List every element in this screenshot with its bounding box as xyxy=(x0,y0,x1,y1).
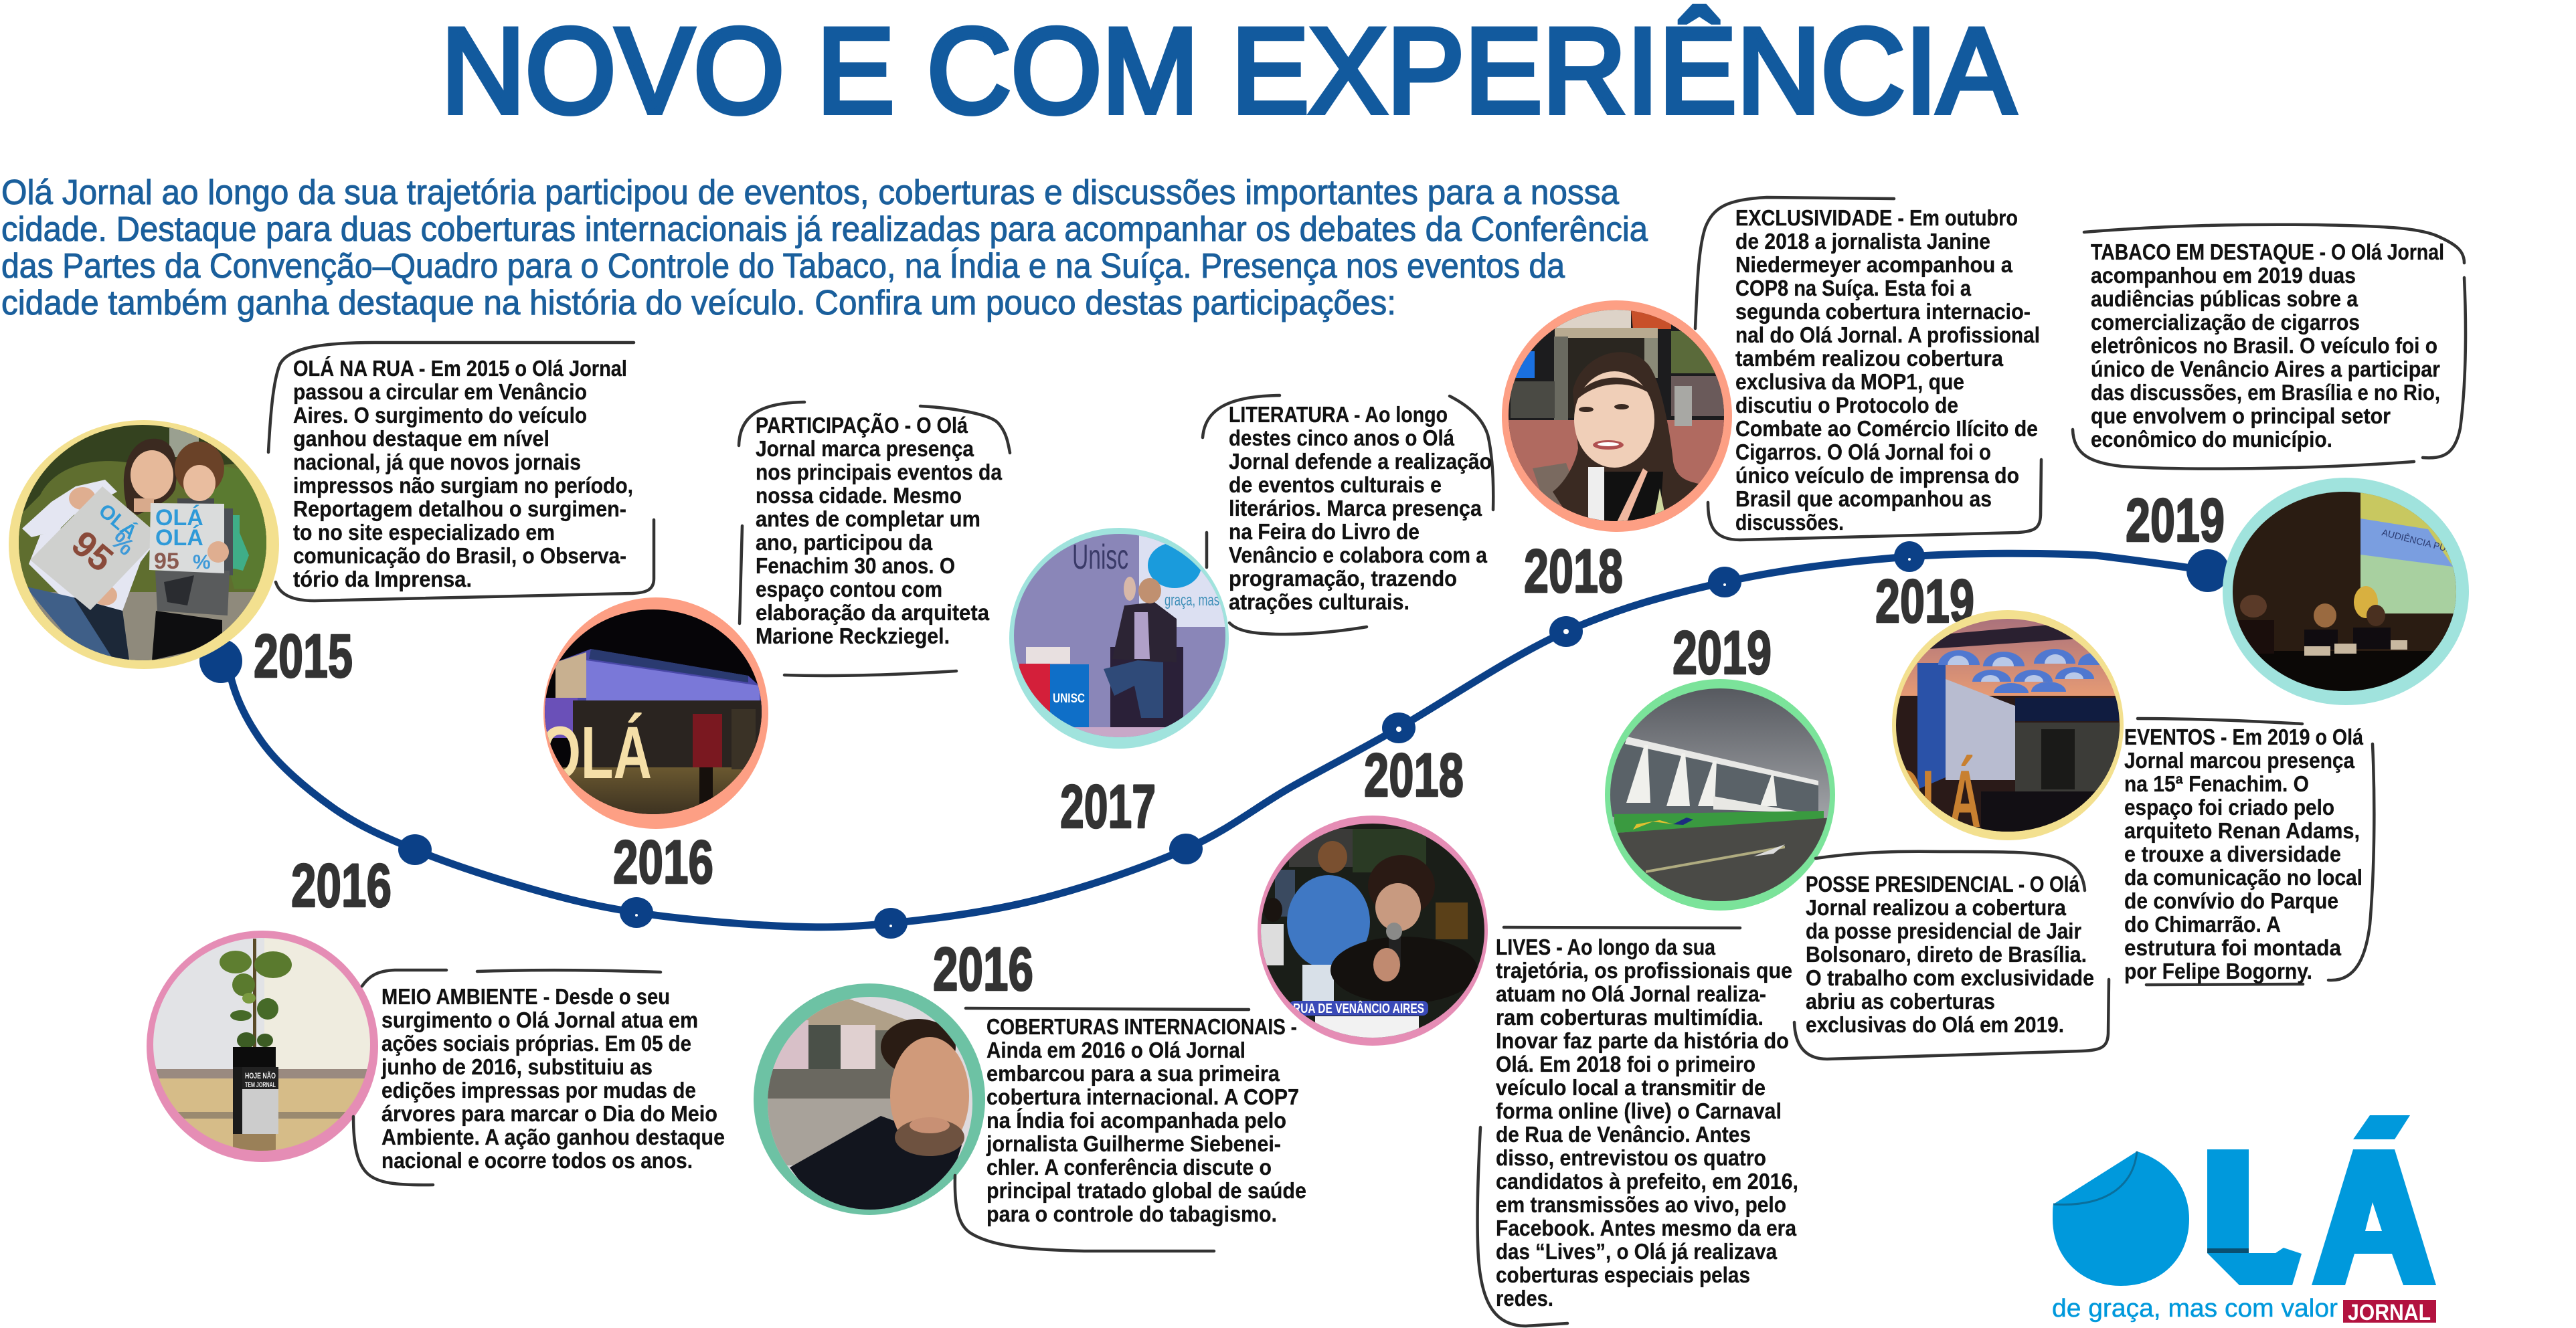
text block: Eventos: de convívio do Parque xyxy=(2124,888,2338,913)
text block: Exclusividade: COP8 na Suíça. Esta foi a xyxy=(1735,276,1972,300)
text block: Lives: disso, entrevistou os quatro xyxy=(1496,1145,1766,1170)
text block: Exclusividade: exclusiva da MOP1, que xyxy=(1735,369,1964,394)
text block: Eventos xyxy=(2124,719,2374,985)
text block: Olá na rua: Reportagem detalhou o surgimen- xyxy=(293,496,626,521)
text block: Tabaco em destaque: comercialização de cigarros xyxy=(2091,310,2360,335)
text block: Participação: Jornal marca presença xyxy=(756,436,974,461)
logo: Olá Jornal: JORNAL xyxy=(2348,1300,2431,1325)
photo: tree seedling: HOJE NÃO xyxy=(245,1070,276,1080)
text block: Lives: coberturas especiais pelas xyxy=(1496,1262,1750,1287)
text block: Exclusividade: nal do Olá Jornal. A profissional xyxy=(1735,322,2040,347)
text block: Lives: Olá. Em 2018 foi o primeiro xyxy=(1496,1052,1755,1076)
text block: Tabaco em destaque: acompanhou em 2019 duas xyxy=(2091,263,2356,288)
text block: Olá na rua: Aires. O surgimento do veículo xyxy=(293,403,587,428)
text block: Coberturas internacionais: jornalista Guilherme Siebenei- xyxy=(986,1131,1281,1156)
photo: 2015 woman and boy with newspapers: 95 xyxy=(64,523,120,580)
year label 2016 Meio ambiente: 2016 xyxy=(291,852,392,920)
text block: Participação: PARTICIPAÇÃO - O Olá xyxy=(756,413,968,438)
text block: Participação: antes de completar um xyxy=(756,506,980,531)
text block: Participação: elaboração da arquiteta xyxy=(756,600,990,625)
text block: Coberturas internacionais: principal tratado global de saúde xyxy=(986,1178,1306,1203)
intro text block: cidade também ganha destaque na história do veículo. Confira um pouco destas participações: xyxy=(1,284,1396,322)
text block: Posse presidencial: POSSE PRESIDENCIAL - O Olá xyxy=(1806,872,2080,896)
text block: Lives: redes. xyxy=(1496,1286,1553,1311)
text block: Exclusividade: Niedermeyer acompanhou a xyxy=(1735,252,2013,277)
photo: Fenachim OLÁ letters at night xyxy=(539,597,770,829)
text block: Posse presidencial: da posse presidencial de Jair xyxy=(1806,919,2081,943)
text block: Literatura: de eventos culturais e xyxy=(1229,472,1442,497)
text block: Exclusividade: discussões. xyxy=(1735,510,1844,535)
text block: Lives: Facebook. Antes mesmo da era xyxy=(1496,1216,1797,1240)
text block: Tabaco em destaque: das discussões, em Brasília e no Rio, xyxy=(2091,380,2440,405)
text block: Coberturas internacionais: COBERTURAS INTERNACIONAIS - xyxy=(986,1014,1297,1039)
text block: Eventos: Jornal marcou presença xyxy=(2124,748,2355,773)
year label 2016 Participação: 2016 xyxy=(613,828,713,896)
text block: Literatura xyxy=(1203,395,1493,634)
photo: literature panel speaker on stage: graça, mas xyxy=(1165,591,1219,609)
title: NOVO E COM EXPERIÊNCIA xyxy=(441,3,2015,138)
text block: Tabaco em destaque: econômico do município. xyxy=(2091,427,2332,452)
photo: live carnival broadcast reporter xyxy=(1258,816,1489,1046)
text block: Meio ambiente xyxy=(353,970,725,1185)
text block: Literatura: destes cinco anos o Olá xyxy=(1229,425,1455,450)
text block: Lives: de Rua de Venâncio. Antes xyxy=(1496,1122,1751,1147)
text block: Meio ambiente: MEIO AMBIENTE - Desde o seu xyxy=(381,984,670,1009)
logo: Olá Jornal xyxy=(2052,1115,2436,1325)
text block: Meio ambiente: árvores para marcar o Dia do Meio xyxy=(381,1101,717,1126)
text block: Literatura: literários. Marca presença xyxy=(1229,496,1482,520)
photo: journalist Janine portrait xyxy=(1502,300,1732,532)
text block: Posse presidencial: Bolsonaro, direto de Brasília. xyxy=(1806,942,2087,967)
intro text block: Olá Jornal ao longo da sua trajetória participou de eventos, coberturas e discussões importantes para a nossa xyxy=(1,173,1619,212)
photo: Fenachim OLÁ letters at night: OLÁ xyxy=(539,712,652,794)
photo: 2015 woman and boy with newspapers: OLÁ xyxy=(155,525,203,551)
photo: 2015 woman and boy with newspapers: OLÁ xyxy=(155,505,203,531)
text block: Olá na rua xyxy=(268,343,654,601)
text block: Coberturas internacionais xyxy=(955,1008,1306,1251)
text block: Lives: forma online (live) o Carnaval xyxy=(1496,1099,1782,1123)
year label 2017: 2017 xyxy=(1060,773,1156,841)
text block: Literatura: LITERATURA - Ao longo xyxy=(1229,402,1448,427)
text block: Olá na rua: tório da Imprensa. xyxy=(293,567,472,591)
year label 2019 Tabaco: 2019 xyxy=(2126,486,2225,555)
year label 2016 Coberturas: 2016 xyxy=(933,935,1033,1004)
text block: Lives: LIVES - Ao longo da sua xyxy=(1496,935,1716,959)
text block: Posse presidencial: Jornal realizou a cobertura xyxy=(1806,895,2067,920)
photo: 2015 woman and boy with newspapers: % xyxy=(106,526,140,561)
text block: Meio ambiente: ações sociais próprias. Em 05 de xyxy=(381,1031,691,1056)
text block: Lives: candidatos à prefeito, em 2016, xyxy=(1496,1169,1798,1194)
text block: Olá na rua: ganhou destaque em nível xyxy=(293,426,549,451)
text block: Tabaco em destaque xyxy=(2073,225,2466,469)
text block: Olá na rua: comunicação do Brasil, o Observa- xyxy=(293,543,626,568)
text block: Meio ambiente: Ambiente. A ação ganhou destaque xyxy=(381,1125,725,1149)
text block: Exclusividade: Cigarros. O Olá Jornal foi o xyxy=(1735,440,1991,464)
text block: Lives: trajetória, os profissionais que xyxy=(1496,958,1792,983)
text block: Lives: Inovar faz parte da história do xyxy=(1496,1028,1789,1053)
photo: tree seedling xyxy=(147,931,378,1162)
text block: Exclusividade xyxy=(1695,197,2041,540)
text block: Participação: espaço contou com xyxy=(756,577,942,601)
text block: Participação xyxy=(739,402,1010,676)
text block: Eventos: da comunicação no local xyxy=(2124,865,2363,890)
text block: Exclusividade: EXCLUSIVIDADE - Em outubro xyxy=(1735,205,2018,230)
text block: Olá na rua: OLÁ NA RUA - Em 2015 o Olá Jornal xyxy=(293,356,627,381)
text block: Olá na rua: passou a circular em Venâncio xyxy=(293,379,587,404)
text block: Coberturas internacionais: Ainda em 2016 o Olá Jornal xyxy=(986,1038,1246,1062)
year label 2019 Eventos: 2019 xyxy=(1875,567,1974,636)
text block: Exclusividade: de 2018 a jornalista Janine xyxy=(1735,229,1990,254)
text block: Eventos: por Felipe Bogorny. xyxy=(2124,959,2312,983)
text block: Eventos: na 15ª Fenachim. O xyxy=(2124,771,2309,796)
intro text block: das Partes da Convenção–Quadro para o Controle do Tabaco, na Índia e na Suíça. Presença nos eventos da xyxy=(1,247,1565,286)
text block: Tabaco em destaque: que envolvem o principal setor xyxy=(2091,403,2391,428)
year label 2018 Exclusividade: 2018 xyxy=(1524,537,1623,605)
text block: Exclusividade: também realizou cobertura xyxy=(1735,346,2004,371)
text block: Eventos: e trouxe a diversidade xyxy=(2124,842,2341,866)
text block: Eventos: arquiteto Renan Adams, xyxy=(2124,818,2360,843)
text block: Lives: veículo local a transmitir de xyxy=(1496,1075,1766,1100)
text block: Participação: Fenachim 30 anos. O xyxy=(756,553,955,578)
photo: tree seedling: TEM JORNAL xyxy=(245,1081,276,1089)
text block: Meio ambiente: nacional e ocorre todos os anos. xyxy=(381,1148,693,1173)
text block: Eventos: do Chimarrão. A xyxy=(2124,912,2281,937)
year label 2018 Lives: 2018 xyxy=(1364,741,1464,810)
photo: 2015 woman and boy with newspapers xyxy=(9,420,281,669)
text block: Olá na rua: nacional, já que novos jornais xyxy=(293,450,581,474)
intro text block: cidade. Destaque para duas coberturas internacionais já realizadas para acompanhar os debates da Conferência xyxy=(1,210,1648,249)
text block: Coberturas internacionais: para o controle do tabagismo. xyxy=(986,1202,1277,1226)
text block: Coberturas internacionais: na Índia foi acompanhada pelo xyxy=(986,1108,1286,1133)
text block: Participação: Marione Reckziegel. xyxy=(756,624,950,648)
text block: Coberturas internacionais: cobertura internacional. A COP7 xyxy=(986,1084,1299,1109)
year label 2015: 2015 xyxy=(254,622,353,690)
year label 2019 Posse: 2019 xyxy=(1672,619,1772,687)
text block: Coberturas internacionais: embarcou para a sua primeira xyxy=(986,1061,1280,1086)
text block: Literatura: programação, trazendo xyxy=(1229,566,1457,591)
photo: Guilherme portrait in India xyxy=(754,983,985,1215)
text block: Participação: nos principais eventos da xyxy=(756,460,1003,484)
timeline curve with nodes xyxy=(199,541,2229,939)
text block: Posse presidencial: abriu as coberturas xyxy=(1806,989,1995,1014)
text block: Coberturas internacionais: chler. A conferência discute o xyxy=(986,1155,1272,1179)
text block: Literatura: Venâncio e colabora com a xyxy=(1229,543,1488,567)
text block: Exclusividade: Combate ao Comércio Ilícito de xyxy=(1735,416,2038,441)
photo: 2015 woman and boy with newspapers: 95 xyxy=(154,549,179,574)
text block: Lives: das “Lives”, o Olá já realizava xyxy=(1496,1239,1778,1264)
text block: Literatura: atrações culturais. xyxy=(1229,589,1409,614)
photo: public hearing panel with screen xyxy=(2223,478,2474,705)
photo: 2015 woman and boy with newspapers: OLÁ xyxy=(94,499,141,544)
text block: Literatura: na Feira do Livro de xyxy=(1229,519,1420,544)
text block: Meio ambiente: junho de 2016, substituiu as xyxy=(381,1054,653,1079)
text block: Tabaco em destaque: eletrônicos no Brasil. O veículo foi o xyxy=(2091,333,2437,358)
photo: literature panel speaker on stage xyxy=(1009,528,1231,749)
photo: Fenachim stand with umbrellas: OLÁ xyxy=(1887,753,1981,844)
text block: Eventos: EVENTOS - Em 2019 o Olá xyxy=(2124,725,2364,749)
text block: Posse presidencial: exclusivas do Olá em 2019. xyxy=(1806,1012,2064,1037)
text block: Literatura: Jornal defende a realização xyxy=(1229,449,1492,474)
text block: Participação: nossa cidade. Mesmo xyxy=(756,483,962,508)
photo: Fenachim stand with umbrellas xyxy=(1887,610,2124,844)
text block: Posse presidencial: O trabalho com exclusividade xyxy=(1806,965,2094,990)
text block: Meio ambiente: edições impressas por mudas de xyxy=(381,1078,696,1103)
text block: Olá na rua: impressos não surgiam no período, xyxy=(293,473,633,498)
text block: Lives: em transmissões ao vivo, pelo xyxy=(1496,1192,1786,1217)
text block: Exclusividade: único veículo de imprensa do xyxy=(1735,463,2019,488)
intro text block xyxy=(1,173,1648,322)
photo: literature panel speaker on stage: Unisc xyxy=(1072,538,1128,577)
logo: Olá Jornal: de graça, mas com valor xyxy=(2052,1295,2338,1323)
photo: live carnival broadcast reporter: RUA DE VENÂNCIO AIRES xyxy=(1293,1000,1424,1016)
photo: Palácio do Planalto in Brasília xyxy=(1605,679,1835,911)
text block: Olá na rua: to no site especializado em xyxy=(293,520,555,545)
text block: Meio ambiente: surgimento o Olá Jornal atua em xyxy=(381,1008,698,1032)
text block: Lives xyxy=(1478,927,1798,1326)
text block: Tabaco em destaque: TABACO EM DESTAQUE - O Olá Jornal xyxy=(2091,240,2444,264)
text block: Tabaco em destaque: único de Venâncio Aires a participar xyxy=(2091,357,2440,381)
text block: Posse presidencial xyxy=(1794,852,2109,1059)
text block: Exclusividade: segunda cobertura internacio- xyxy=(1735,299,2031,324)
text block: Eventos: espaço foi criado pelo xyxy=(2124,795,2334,820)
text block: Lives: ram coberturas multimídia. xyxy=(1496,1005,1764,1030)
text block: Exclusividade: Brasil que acompanhou as xyxy=(1735,486,1992,511)
photo: literature panel speaker on stage: UNISC xyxy=(1053,692,1085,706)
photo: public hearing panel with screen: AUDIÊNCIA PÚBLICA xyxy=(2381,527,2474,560)
text block: Lives: atuam no Olá Jornal realiza- xyxy=(1496,981,1766,1006)
text block: Eventos: estrutura foi montada xyxy=(2124,935,2342,960)
text block: Tabaco em destaque: audiências públicas sobre a xyxy=(2091,286,2358,311)
text block: Participação: ano, participou da xyxy=(756,530,933,555)
text block: Exclusividade: discutiu o Protocolo de xyxy=(1735,393,1958,417)
photo: 2015 woman and boy with newspapers: % xyxy=(193,551,211,573)
